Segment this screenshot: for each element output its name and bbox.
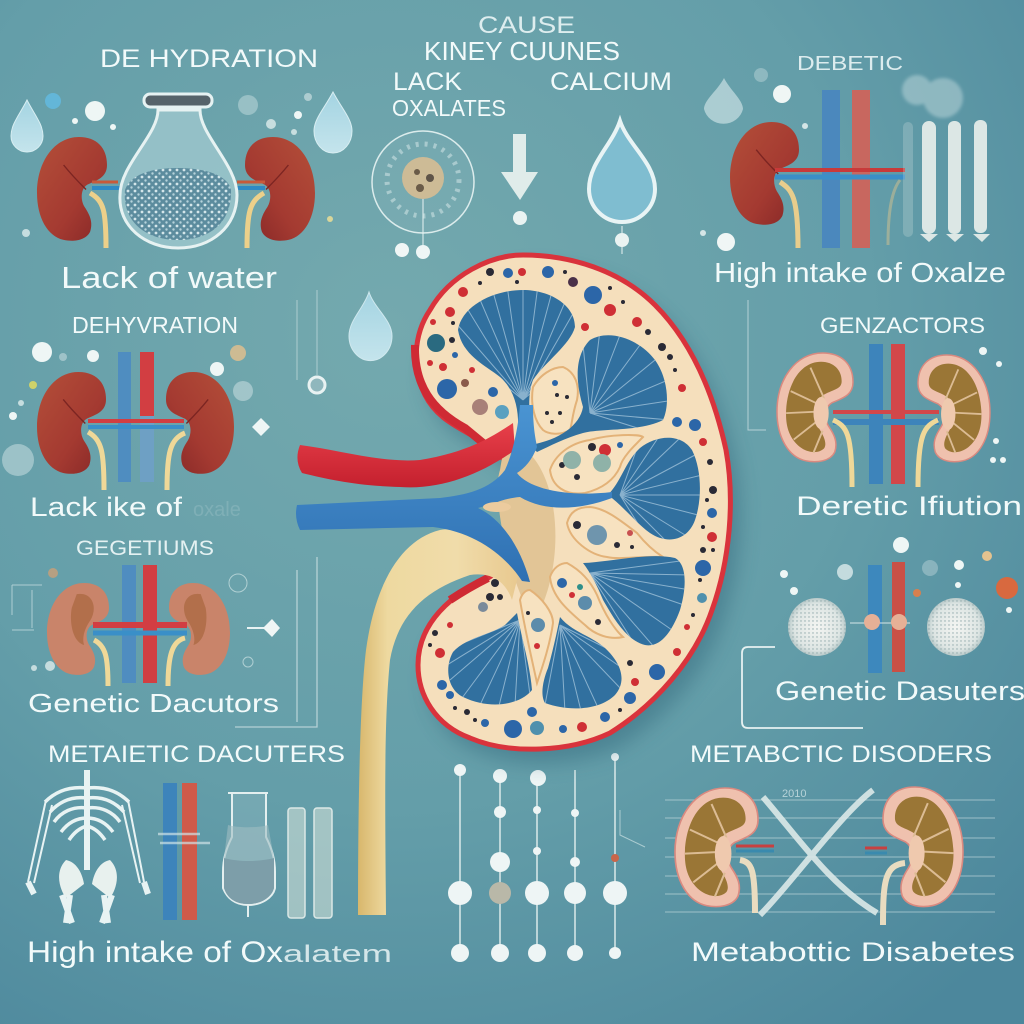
- particles: [2, 342, 270, 476]
- particles: [780, 537, 1018, 613]
- icon: kidneys: [47, 583, 109, 675]
- icon: water drop right: [314, 92, 352, 153]
- thick red rim: [415, 345, 488, 600]
- caption: High intake of Ox: [27, 936, 283, 969]
- panel: genetics left: [12, 537, 317, 727]
- icon: kidneys: [37, 372, 106, 474]
- icon: kidneys: [675, 788, 758, 907]
- heading: DEHYVRATION: [72, 312, 238, 338]
- icon: right kidney: [166, 372, 234, 474]
- connector bracket: [742, 647, 863, 728]
- caption: Deretic Ifiution: [796, 491, 1022, 521]
- heading: METABCTIC DISODERS: [690, 741, 992, 768]
- panel: metabolic bottom-left: [27, 741, 392, 969]
- icon: kidney: [730, 122, 799, 225]
- caption: Lack of water: [61, 260, 277, 295]
- tissue dots: [427, 266, 717, 738]
- kidney body: [416, 255, 730, 749]
- lobe: upper right: [530, 335, 667, 452]
- beige capsules: [520, 367, 663, 683]
- lobe: bottom left: [448, 613, 532, 704]
- icon: cross vessels: [833, 412, 939, 487]
- heading: METAIETIC DACUTERS: [48, 741, 345, 768]
- panel: cause top-center: LACK: [393, 68, 462, 96]
- particles: [979, 347, 1006, 463]
- kidney vessels: [736, 846, 905, 925]
- icon: right kidney: [245, 137, 315, 241]
- icon: cross: [760, 790, 877, 915]
- pelvis spot: [483, 502, 511, 512]
- heading lines: CAUSE: [478, 12, 575, 39]
- particles: [12, 574, 253, 667]
- bottom-center timeline: [448, 753, 627, 962]
- icon: right kidney: [883, 787, 963, 907]
- kidney vessels: [92, 186, 265, 190]
- lobe: lower right: [583, 556, 685, 645]
- icon: left kidney: [37, 137, 107, 241]
- icon: arrow end marker: [513, 211, 527, 225]
- renal artery: [297, 423, 515, 487]
- icon: down arrow: [501, 134, 538, 200]
- particles: [22, 93, 333, 237]
- heading: DEBETIC: [797, 53, 903, 75]
- panel: dehydration left: [2, 312, 270, 522]
- panel: dehydration top-left: [11, 45, 352, 295]
- caption: High intake of Oxalze: [714, 257, 1006, 288]
- icon: flask: [120, 94, 237, 248]
- icon: flask: [223, 793, 275, 917]
- caption: Metabottic Disabetes: [691, 937, 1015, 967]
- icon: crystal circle: [372, 131, 474, 259]
- icon: drop: [704, 78, 743, 124]
- renal vein and branches: [296, 405, 612, 582]
- panel: metabolic disorders bottom-right: [620, 741, 1015, 967]
- panel: diabetic top-right: [700, 53, 1006, 288]
- panel: cause top-center: KINEY CUUNES: [424, 36, 620, 66]
- lobe: bottom middle: [542, 617, 622, 708]
- blue lobes: [448, 290, 700, 708]
- caption: Genetic Dacutors: [28, 688, 279, 718]
- panel: cause top-center: CALCIUM: [550, 68, 672, 96]
- heading: GENZACTORS: [820, 313, 985, 338]
- faded caption: oxale: [193, 499, 241, 521]
- icon: cross vessels: [93, 625, 187, 686]
- icon: right kidney: [918, 355, 990, 462]
- icon: vessels: [775, 90, 905, 248]
- icon: water drop left: [11, 100, 43, 152]
- connector bracket: [235, 557, 317, 727]
- icon: drop connector: [615, 226, 629, 254]
- particle dots: [700, 68, 808, 251]
- icon: cross vessels: [88, 421, 185, 490]
- panel: cause top-center: [372, 12, 672, 259]
- icon: kidneys: [777, 353, 853, 462]
- icon: vessels: [850, 562, 910, 673]
- particles: [902, 75, 963, 118]
- main kidney illustration: [296, 255, 740, 915]
- icon: vessels: [158, 783, 210, 920]
- hilum: [498, 440, 555, 620]
- tiny label: 2010: [782, 788, 806, 800]
- caption: Lack ike of: [30, 492, 183, 522]
- icon: spheres: [788, 598, 985, 656]
- heading: dehydration: DE HYDRATION: [100, 45, 318, 73]
- icon: vessels: [118, 352, 154, 482]
- icon: right kidney: [169, 583, 230, 675]
- lobe: top: [458, 290, 575, 430]
- panel: genetic disasters right: [742, 537, 1024, 728]
- ureter: [358, 529, 522, 915]
- faded caption: alatem: [283, 941, 392, 968]
- connector: [620, 810, 645, 847]
- icon: skeleton: [28, 770, 148, 923]
- lobe fan lines: [447, 284, 704, 715]
- kidney shadow: [426, 269, 740, 763]
- connector lines and small drop: [297, 243, 409, 393]
- icon: test tubes: [903, 120, 990, 242]
- caption: Genetic Dasuters: [775, 676, 1024, 706]
- panel: genetic factors right: [748, 300, 1022, 521]
- lobe: middle right: [608, 438, 700, 539]
- icon: vessels: [122, 565, 157, 683]
- panel: cause top-center: OXALATES: [392, 95, 506, 121]
- marker diamond: [31, 568, 280, 671]
- grid lines: [665, 800, 995, 912]
- icon: test tubes: [288, 808, 332, 918]
- heading: GEGETIUMS: [76, 537, 214, 560]
- connector: [748, 300, 766, 430]
- icon: large drop: [589, 121, 655, 222]
- icon: vessels: [869, 344, 905, 484]
